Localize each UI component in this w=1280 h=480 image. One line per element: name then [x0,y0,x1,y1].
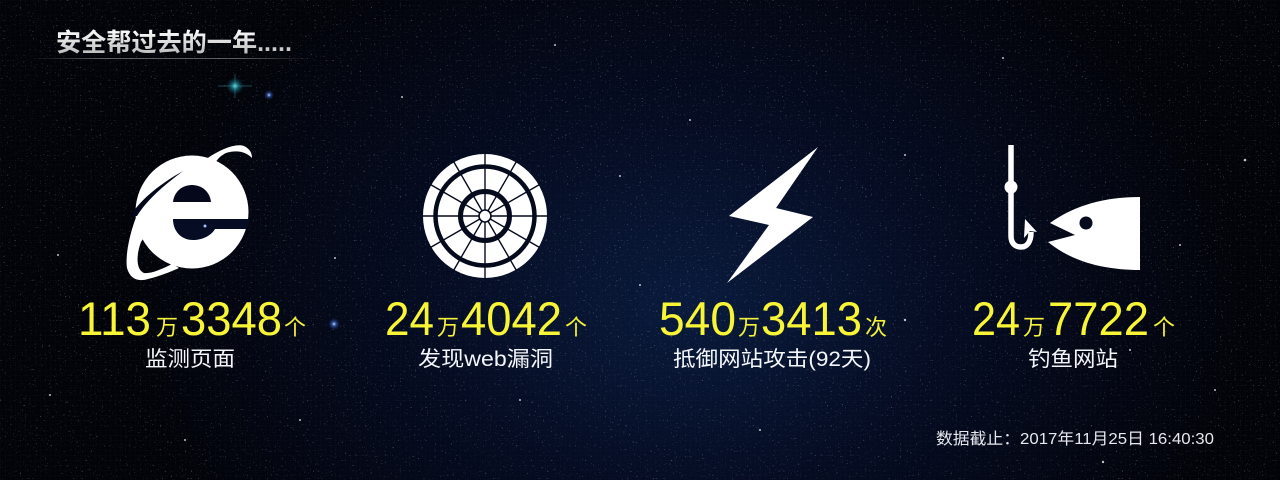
stat: pages monitored: 3348 [181,292,282,345]
stat: attacks blocked: 540 [659,292,736,345]
icon: dartboard wheel [422,153,548,279]
stat: phishing sites: 钓鱼网站 [1028,348,1118,371]
stat: pages monitored: 个 [284,315,306,340]
stat: phishing sites: 个 [1153,315,1175,340]
stat: web vulnerabilities: 4042 [461,292,562,345]
stat: phishing sites: 万 [1023,315,1045,340]
icon: fish [1048,197,1140,270]
stat: phishing sites: 7722 [1048,292,1149,345]
stat: pages monitored [78,292,306,371]
stat: web vulnerabilities [385,292,587,371]
stat: pages monitored: 监测页面 [145,348,235,371]
stat: web vulnerabilities: 发现web漏洞 [418,348,553,371]
icon: internet explorer logo [127,145,252,280]
stat: pages monitored: 113 [78,292,151,345]
icon: fishing hook [1004,145,1037,247]
bright blue star top [264,90,274,100]
stat: phishing sites: 24 [972,292,1020,345]
stat: attacks blocked: 万 [738,315,760,340]
stat: attacks blocked: 3413 [761,292,862,345]
stat: web vulnerabilities: 万 [437,315,459,340]
stat: attacks blocked: 抵御网站攻击(92天) [673,348,871,371]
stat: attacks blocked: 次 [865,315,887,340]
stat: pages monitored: 万 [156,315,178,340]
icon: lightning bolt [727,147,818,283]
stat: attacks blocked [659,292,887,371]
bright blue star between stats [328,318,340,330]
stat: phishing sites [972,292,1175,371]
data cutoff note: 数据截止：2017年11月25日 16:40:30 [936,430,1214,448]
stat: web vulnerabilities: 24 [385,292,434,345]
title: 安全帮过去的一年..... [56,29,292,57]
stat: web vulnerabilities: 个 [565,315,587,340]
bright teal star [218,74,252,98]
